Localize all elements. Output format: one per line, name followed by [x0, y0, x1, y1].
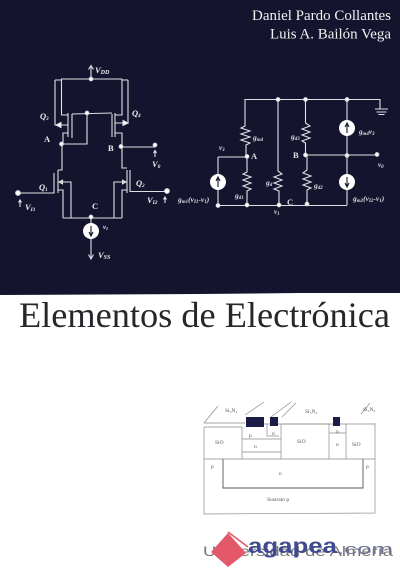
- equivalent circuit labels: g: [253, 133, 257, 142]
- transistor circuit labels: 1: [45, 188, 48, 193]
- cross-section labels: n: [279, 471, 282, 477]
- transistor circuit labels: [25, 65, 161, 261]
- resistor gd3 branch: [302, 100, 310, 155]
- equivalent circuit labels: -v: [198, 195, 205, 204]
- equivalent circuit labels: d: [270, 183, 273, 188]
- equivalent circuit labels: g: [353, 194, 357, 203]
- equivalent circuit labels: v: [219, 144, 222, 152]
- equivalent circuit labels: 1: [379, 199, 382, 204]
- resistor gm4 branch: [241, 100, 250, 157]
- right dependent sources: [339, 100, 355, 205]
- transistor circuit labels: Q: [39, 182, 45, 192]
- transistor circuit labels: I1: [30, 207, 36, 213]
- transistor circuit labels: V: [152, 159, 158, 169]
- cross-section labels: Sustrato p: [267, 497, 289, 503]
- transistor Q4: [112, 79, 128, 168]
- transistor circuit labels: I2: [152, 200, 158, 206]
- equivalent circuit labels: ): [381, 194, 385, 203]
- transistor Q3: [55, 79, 72, 144]
- equivalent circuit labels: m4: [362, 132, 369, 137]
- equivalent circuit labels: v: [378, 161, 381, 169]
- transistor circuit labels: Q: [136, 178, 142, 188]
- gate bridge to node A: [60, 111, 112, 146]
- authors: Luis A. Bailón Vega: [270, 26, 392, 42]
- equivalent circuit labels: d2: [318, 186, 323, 191]
- equivalent circuit labels: 3: [221, 148, 225, 153]
- transistor Q1: [16, 144, 71, 218]
- transistor circuit labels: DD: [100, 70, 110, 76]
- transistor circuit labels: 3: [45, 117, 49, 122]
- equivalent circuit labels: g: [178, 195, 182, 204]
- transistor circuit labels: V: [98, 250, 104, 260]
- panel: dark navy cover band: [0, 0, 400, 295]
- transistor circuit labels: C: [92, 201, 98, 211]
- cross-section labels: n: [254, 444, 257, 450]
- cross-section labels: n: [272, 431, 275, 437]
- icon: red book: [211, 532, 248, 567]
- cross-section labels: SiO: [352, 442, 361, 448]
- cross-section labels: Si₃N₄: [363, 407, 375, 413]
- publisher name: Universidad de Almería: [203, 544, 394, 559]
- small-signal equivalent circuit: [210, 98, 388, 207]
- cross-section labels: Si₃N₄: [225, 408, 237, 414]
- equivalent circuit labels: m1: [182, 200, 188, 205]
- transistor circuit labels: SS: [104, 255, 111, 261]
- equivalent circuit labels: -v: [373, 194, 380, 203]
- cross-section labels: p: [366, 464, 369, 470]
- resistor gd middle branch: [274, 100, 282, 205]
- dark metal contacts: [246, 417, 340, 427]
- equivalent circuit labels: (v: [188, 195, 195, 204]
- equivalent circuit labels: [177, 128, 385, 217]
- dot com wordmark: .com: [337, 541, 393, 558]
- equivalent circuit labels: d3: [295, 137, 300, 142]
- equivalent circuit labels: I2: [368, 199, 374, 204]
- equivalent circuit labels: ): [206, 195, 210, 204]
- cross-section labels: n: [336, 442, 339, 448]
- equivalent circuit labels: 1: [277, 212, 280, 217]
- equivalent circuit labels: v: [274, 208, 277, 216]
- transistor circuit labels: V: [147, 195, 153, 205]
- transistor circuit labels: A: [44, 134, 51, 144]
- agapea logo: [211, 532, 393, 567]
- equivalent circuit labels: 0: [381, 165, 384, 170]
- resistor gd1 branch: [243, 157, 251, 205]
- equivalent circuit labels: m4: [257, 138, 264, 143]
- cross-section labels: [211, 407, 375, 503]
- transistor circuit labels: 2: [141, 184, 145, 189]
- title: Elementos de Electrónica: [19, 295, 390, 335]
- equivalent circuit labels: g: [314, 181, 318, 190]
- transistor circuit labels: 4: [137, 114, 141, 119]
- equivalent circuit labels: g: [235, 191, 239, 200]
- transistor circuit labels: V: [25, 202, 31, 212]
- equivalent circuit labels: d1: [239, 196, 244, 201]
- transistor circuit diagram: [16, 66, 169, 259]
- semiconductor cross-section diagram: [204, 402, 375, 514]
- equivalent circuit labels: A: [251, 151, 258, 161]
- equivalent circuit labels: m2: [357, 199, 364, 204]
- n-well outline: [223, 459, 363, 488]
- transistor Q2: [114, 170, 169, 218]
- tail rail with current source: [63, 215, 122, 259]
- equivalent circuit labels: (v: [363, 194, 370, 203]
- cross-section labels: SiO: [297, 439, 306, 445]
- cross-section labels: p: [249, 433, 252, 439]
- top rail and ground symbol: [245, 98, 388, 114]
- equivalent circuit labels: g: [266, 178, 270, 187]
- node A wire with left source: [210, 155, 249, 206]
- cross-section outlines: [204, 402, 375, 514]
- transistor circuit labels: Q: [40, 111, 46, 121]
- equivalent circuit labels: g: [291, 132, 295, 141]
- equivalent circuit labels: g: [359, 128, 362, 136]
- equivalent circuit labels: 3: [371, 132, 375, 137]
- transistor circuit labels: Q: [132, 108, 138, 118]
- bottom rail: [216, 202, 347, 207]
- equivalent circuit labels: 1: [204, 200, 207, 205]
- equivalent circuit labels: v: [369, 128, 373, 136]
- agapea wordmark: agapea: [248, 535, 337, 558]
- node B and output: [119, 143, 157, 157]
- transistor circuit labels: B: [108, 143, 114, 153]
- cross-section labels: n: [336, 429, 339, 435]
- transistor circuit labels: v: [103, 224, 106, 231]
- transistor circuit labels: 0: [158, 164, 161, 170]
- equivalent circuit labels: B: [293, 150, 299, 160]
- authors: [252, 8, 392, 42]
- authors: Daniel Pardo Collantes: [252, 8, 391, 24]
- node B wire and output: [304, 153, 379, 157]
- equivalent circuit labels: C: [287, 197, 293, 207]
- cross-section labels: p: [211, 464, 214, 470]
- VDD rail and arrow: [61, 66, 122, 81]
- transistor circuit labels: V: [95, 65, 101, 75]
- resistor gd2 branch: [303, 155, 311, 204]
- cross-section labels: Si₃N₄: [305, 409, 317, 415]
- transistor circuit labels: 1: [106, 226, 108, 231]
- cross-section labels: SiO: [215, 440, 224, 446]
- equivalent circuit labels: I1: [193, 200, 198, 205]
